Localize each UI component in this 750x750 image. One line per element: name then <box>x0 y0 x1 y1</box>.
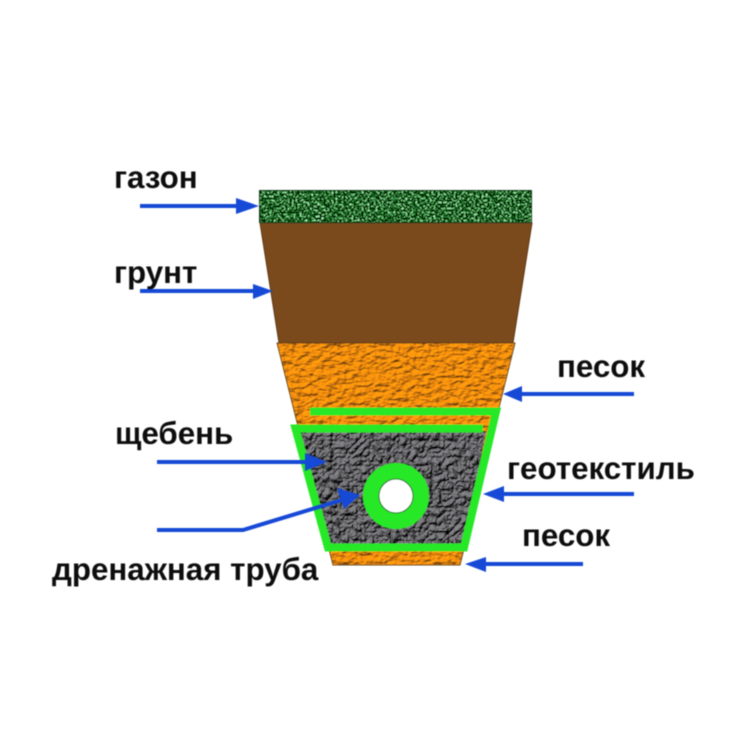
geotextile wrap <box>296 412 496 548</box>
arrow: crushed stone <box>157 453 327 471</box>
arrow: lawn <box>140 198 259 214</box>
layer: lawn <box>259 190 532 223</box>
drainage pipe <box>371 471 421 521</box>
arrow: lower sand <box>465 557 583 572</box>
arrow: soil <box>140 284 273 299</box>
layer: soil <box>260 223 532 343</box>
arrow: upper sand <box>503 386 634 402</box>
label: upper sand: песок <box>557 349 645 384</box>
label: crushed stone: щебень <box>115 416 233 451</box>
arrows and labels <box>52 160 695 587</box>
panel: soil cross-section <box>259 190 532 565</box>
label: lawn: газон <box>114 160 198 195</box>
label: soil: грунт <box>114 255 197 290</box>
label: lower sand: песок <box>522 518 610 553</box>
layer: crushed stone <box>299 431 486 545</box>
arrow: geotextile <box>483 486 634 502</box>
layer: upper and lower sand <box>277 343 515 565</box>
label: drainage pipe: дренажная труба <box>52 552 319 587</box>
label: geotextile: геотекстиль <box>507 451 695 486</box>
arrow: drainage pipe <box>157 488 360 530</box>
